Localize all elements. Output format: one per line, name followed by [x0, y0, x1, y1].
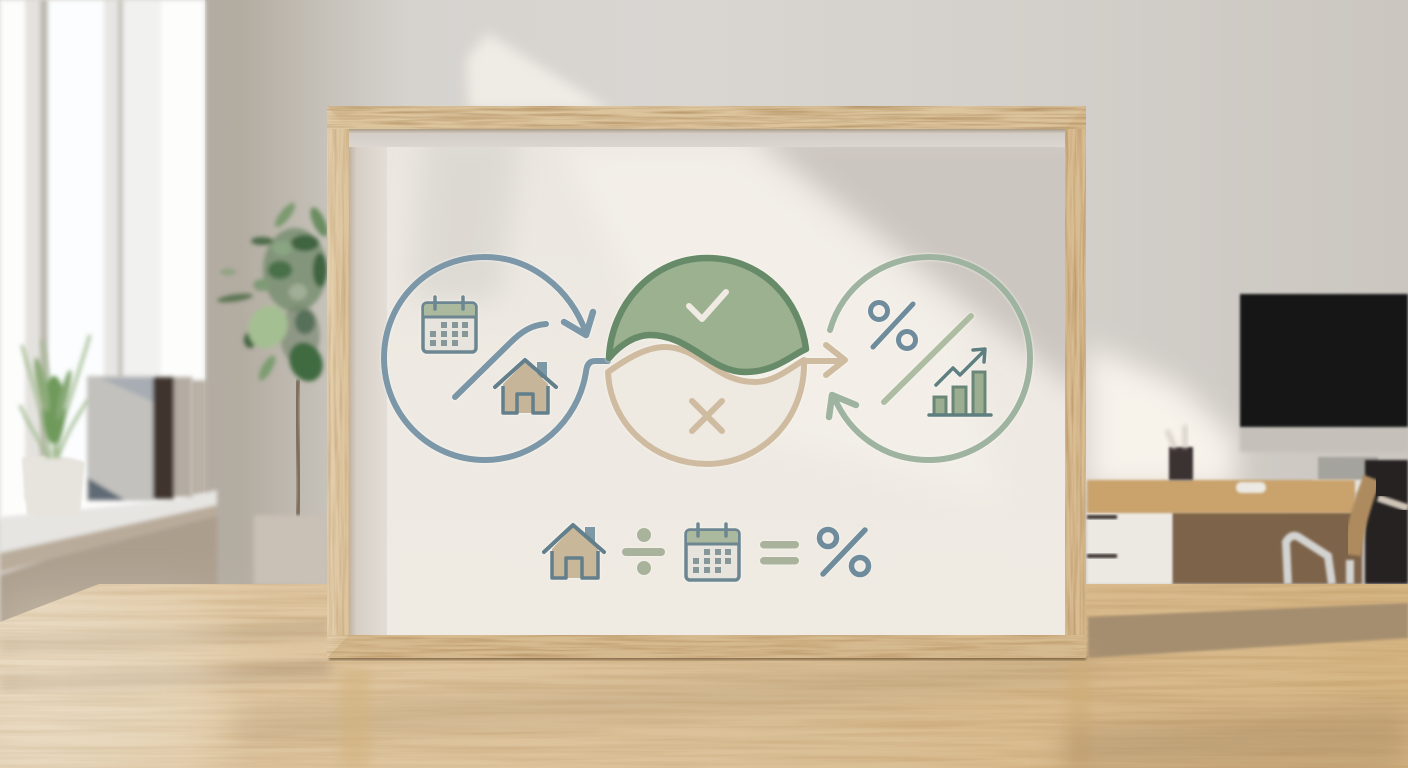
background: wall [205, 0, 1408, 600]
arrowhead, blue [564, 312, 593, 335]
icon: percent [820, 530, 868, 574]
panel: home value over time circle [384, 257, 608, 460]
icon: equals sign [760, 541, 799, 564]
picture mat and paper [349, 129, 1090, 635]
diagonal line [884, 316, 971, 402]
background: small potted plant [20, 335, 90, 518]
background: large potted plant [217, 200, 331, 585]
lower tan half with arrow out [608, 345, 845, 464]
background: binders on sill [87, 376, 192, 501]
equation: house divided by calendar equals percent [544, 524, 868, 580]
wooden picture frame [327, 106, 1086, 658]
background: window [0, 0, 207, 520]
icon: cross mark [692, 401, 722, 431]
circle arrow, blue [384, 257, 608, 460]
icon: calendar [686, 524, 739, 580]
arrowhead, sage [829, 395, 856, 417]
icon: check mark [689, 292, 726, 319]
upper green half [609, 258, 806, 372]
icon: percent [870, 302, 916, 348]
background: desk with monitor [1087, 294, 1408, 584]
panel: decision split circle [608, 258, 845, 464]
icon: house [544, 525, 604, 578]
icon: house [495, 360, 556, 413]
rising line [455, 324, 546, 397]
icon: divide sign [622, 528, 665, 575]
panel: rate and growth circle [829, 257, 1030, 460]
icon: bar chart with trend arrow [929, 349, 991, 415]
diagram: three-stage loop [384, 257, 1030, 464]
circle arrow, sage [830, 257, 1030, 460]
background: window sill and cabinet [0, 490, 217, 640]
table top [0, 584, 1408, 768]
icon: calendar [423, 297, 476, 352]
